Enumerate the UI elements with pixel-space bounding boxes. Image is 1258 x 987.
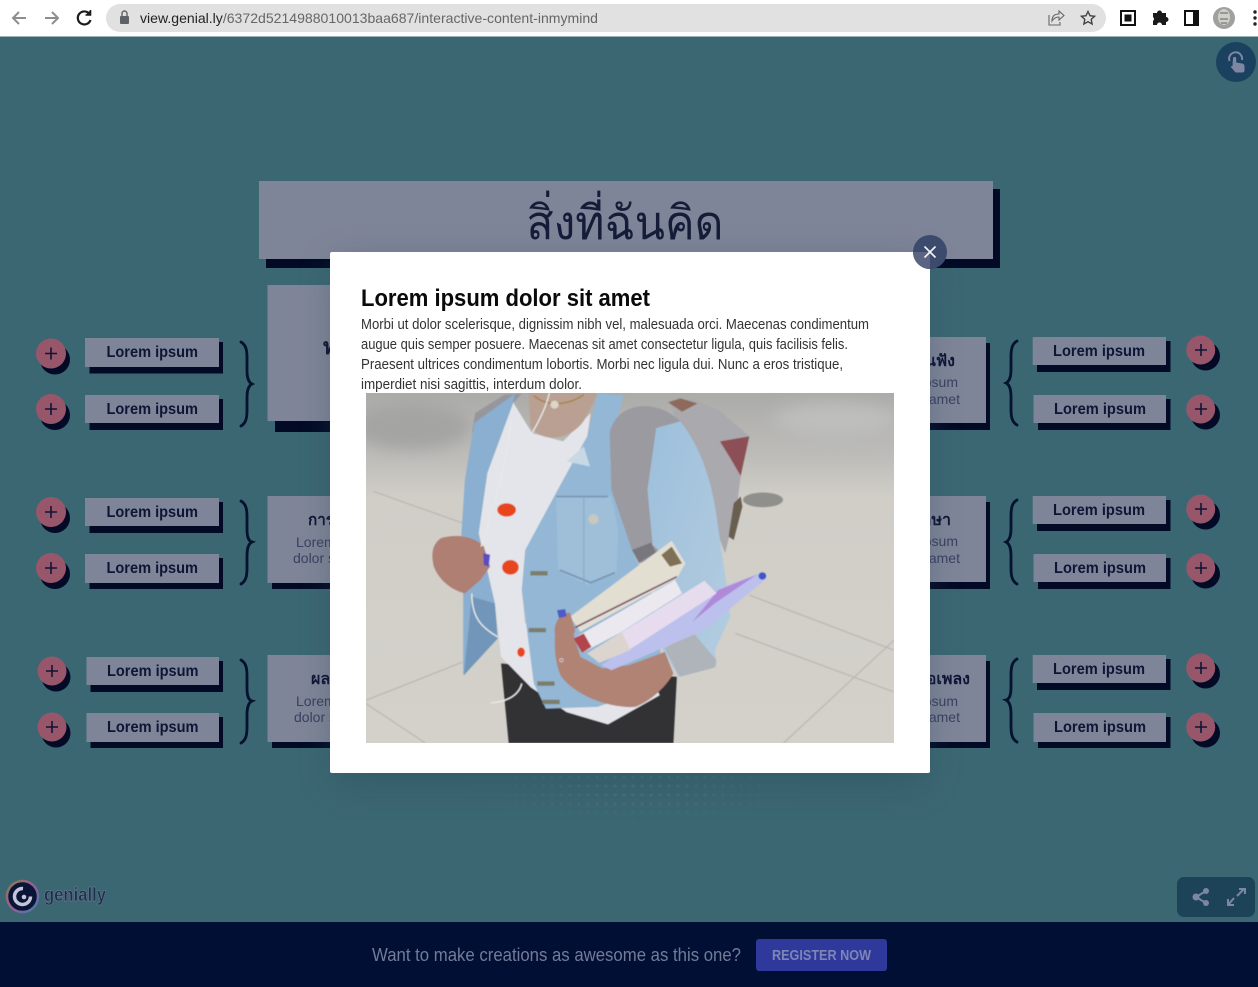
left hand [432, 536, 490, 593]
icon: avatar [1213, 7, 1235, 29]
box: left top: ทำ [323, 334, 350, 359]
book middle [573, 580, 682, 653]
modal body text [361, 317, 869, 393]
touch button [1216, 42, 1256, 82]
pins [497, 503, 516, 517]
icon: extension square [1121, 11, 1135, 25]
register button [756, 939, 887, 971]
title text: สิ่งที่ฉันคิด [526, 190, 724, 249]
left column items [36, 338, 223, 748]
item: right row 3a: Lorem ipsum [1053, 661, 1145, 678]
item: right row 1a [1033, 336, 1220, 372]
item: row 1a: Lorem ipsum [106, 344, 198, 361]
modal shadow [335, 262, 925, 784]
icon: logo circle [7, 881, 38, 912]
box: right middle: Lorem ipsum [877, 533, 958, 549]
panel: left central boxes [268, 285, 475, 748]
panel: modal [330, 252, 930, 773]
box: left middle: Lorem ipsum [296, 534, 377, 550]
box: left bottom: Lorem ipsum [296, 693, 377, 709]
panel: right central boxes [786, 337, 990, 748]
modal body text: augue quis semper posuere. Maecenas sit amet consectetur ligula, quis facilisis felis. [361, 337, 848, 353]
backpack strap [610, 406, 680, 563]
box: right bottom: เนื้อเพลง [910, 666, 970, 688]
close button [913, 235, 947, 269]
jacket sleeve [648, 421, 730, 677]
box: right bottom: Lorem ipsum [877, 693, 958, 709]
pavement shading [353, 403, 897, 450]
box: left top [268, 285, 475, 432]
genially logo [7, 881, 106, 912]
browser toolbar [0, 0, 1258, 36]
palm [555, 622, 673, 707]
modal body text: Morbi ut dolor scelerisque, dignissim nibh vel, malesuada orci. Maecenas condimentum [361, 317, 869, 333]
icon: share [1192, 888, 1209, 906]
box: right bottom: dolor sit amet [876, 709, 960, 725]
modal body text: imperdiet nisi sagittis, interdum dolor. [361, 377, 582, 393]
item: row 3a [38, 656, 223, 692]
icon: reload [78, 10, 90, 24]
item: row 3b [38, 712, 223, 748]
binder [570, 541, 685, 632]
icon: lock [120, 11, 129, 24]
purple folder [601, 573, 766, 670]
item: right row 3b [1034, 712, 1220, 748]
box: left middle: dolor sit amet [293, 550, 377, 566]
item: right row 2b: Lorem ipsum [1054, 560, 1146, 577]
pants [501, 664, 677, 743]
address bar [106, 4, 1106, 32]
box: right top: ฉันฟัง [914, 352, 955, 370]
item: row 2a: Lorem ipsum [106, 504, 198, 521]
icon: menu dots [1253, 10, 1257, 26]
item: right row 3a [1033, 654, 1220, 690]
backpack [670, 399, 749, 553]
url text: view.genial.ly/6372d5214988010013baa687/interactive-content-inmymind [140, 10, 598, 26]
item: row 2a [36, 497, 223, 533]
promo bar [0, 922, 1258, 987]
modal heading: Lorem ipsum dolor sit amet [361, 285, 650, 312]
jacket right body [522, 393, 663, 709]
t-shirt hem [495, 603, 660, 724]
box: right top: dolor sit amet [876, 391, 960, 407]
item: right row 1a: Lorem ipsum [1053, 343, 1145, 360]
item: right row 2a: Lorem ipsum [1053, 502, 1145, 519]
icon: close x [924, 246, 936, 258]
item: right row 2a [1033, 494, 1220, 531]
braces [241, 341, 1017, 743]
earphone cable [472, 420, 522, 703]
icon: share page [1049, 11, 1064, 25]
icon: side panel [1185, 11, 1198, 25]
promo text: Want to make creations as awesome as this one? [372, 945, 741, 965]
logo wordmark: genially [44, 885, 106, 906]
item: right row 2b [1034, 554, 1220, 589]
book lower [587, 581, 717, 662]
skin neck [529, 393, 598, 438]
jacket left panel [461, 394, 515, 675]
icon: forward arrow [45, 12, 58, 24]
right column items [1033, 336, 1220, 748]
box: right bottom [786, 655, 990, 748]
box: left middle: การ [308, 512, 334, 529]
photo: student holding books [366, 393, 894, 743]
title box [259, 181, 1000, 268]
icon: puzzle [1153, 11, 1168, 25]
item: row 2b: Lorem ipsum [106, 560, 198, 577]
register button: REGISTER NOW [772, 948, 871, 964]
item: row 3b: Lorem ipsum [107, 719, 198, 736]
item: row 2b [36, 553, 223, 589]
fingers [555, 613, 575, 657]
item: right row 1b [1034, 394, 1220, 430]
item: right row 3b: Lorem ipsum [1054, 719, 1146, 736]
box: left bottom: ผล [311, 671, 330, 688]
icon: back arrow [13, 12, 26, 24]
modal body text: Praesent ultrices condimentum lobortis. Morbi nec ligula dui. Nunc a eros tristique, [361, 357, 843, 373]
box: right middle [786, 496, 990, 589]
item: right row 1b: Lorem ipsum [1054, 401, 1146, 418]
t-shirt [479, 400, 656, 724]
icon: fullscreen [1228, 889, 1245, 905]
item: row 1b: Lorem ipsum [106, 401, 198, 418]
box: left middle [268, 496, 472, 589]
item: row 3a: Lorem ipsum [107, 663, 198, 680]
share controls [1177, 877, 1255, 917]
item: row 1b [36, 394, 223, 430]
box: left bottom: dolor sit amet [294, 709, 378, 725]
box: right middle: dolor sit amet [876, 550, 960, 566]
box: right top: Lorem ipsum [877, 374, 958, 390]
box: right middle: ภาษา [912, 512, 951, 529]
box: right top [786, 337, 990, 430]
icon: star [1081, 12, 1095, 24]
dotted texture [596, 784, 687, 796]
item: row 1a [36, 338, 223, 374]
icon: hand tap [1229, 52, 1244, 72]
box: left bottom [268, 655, 472, 748]
